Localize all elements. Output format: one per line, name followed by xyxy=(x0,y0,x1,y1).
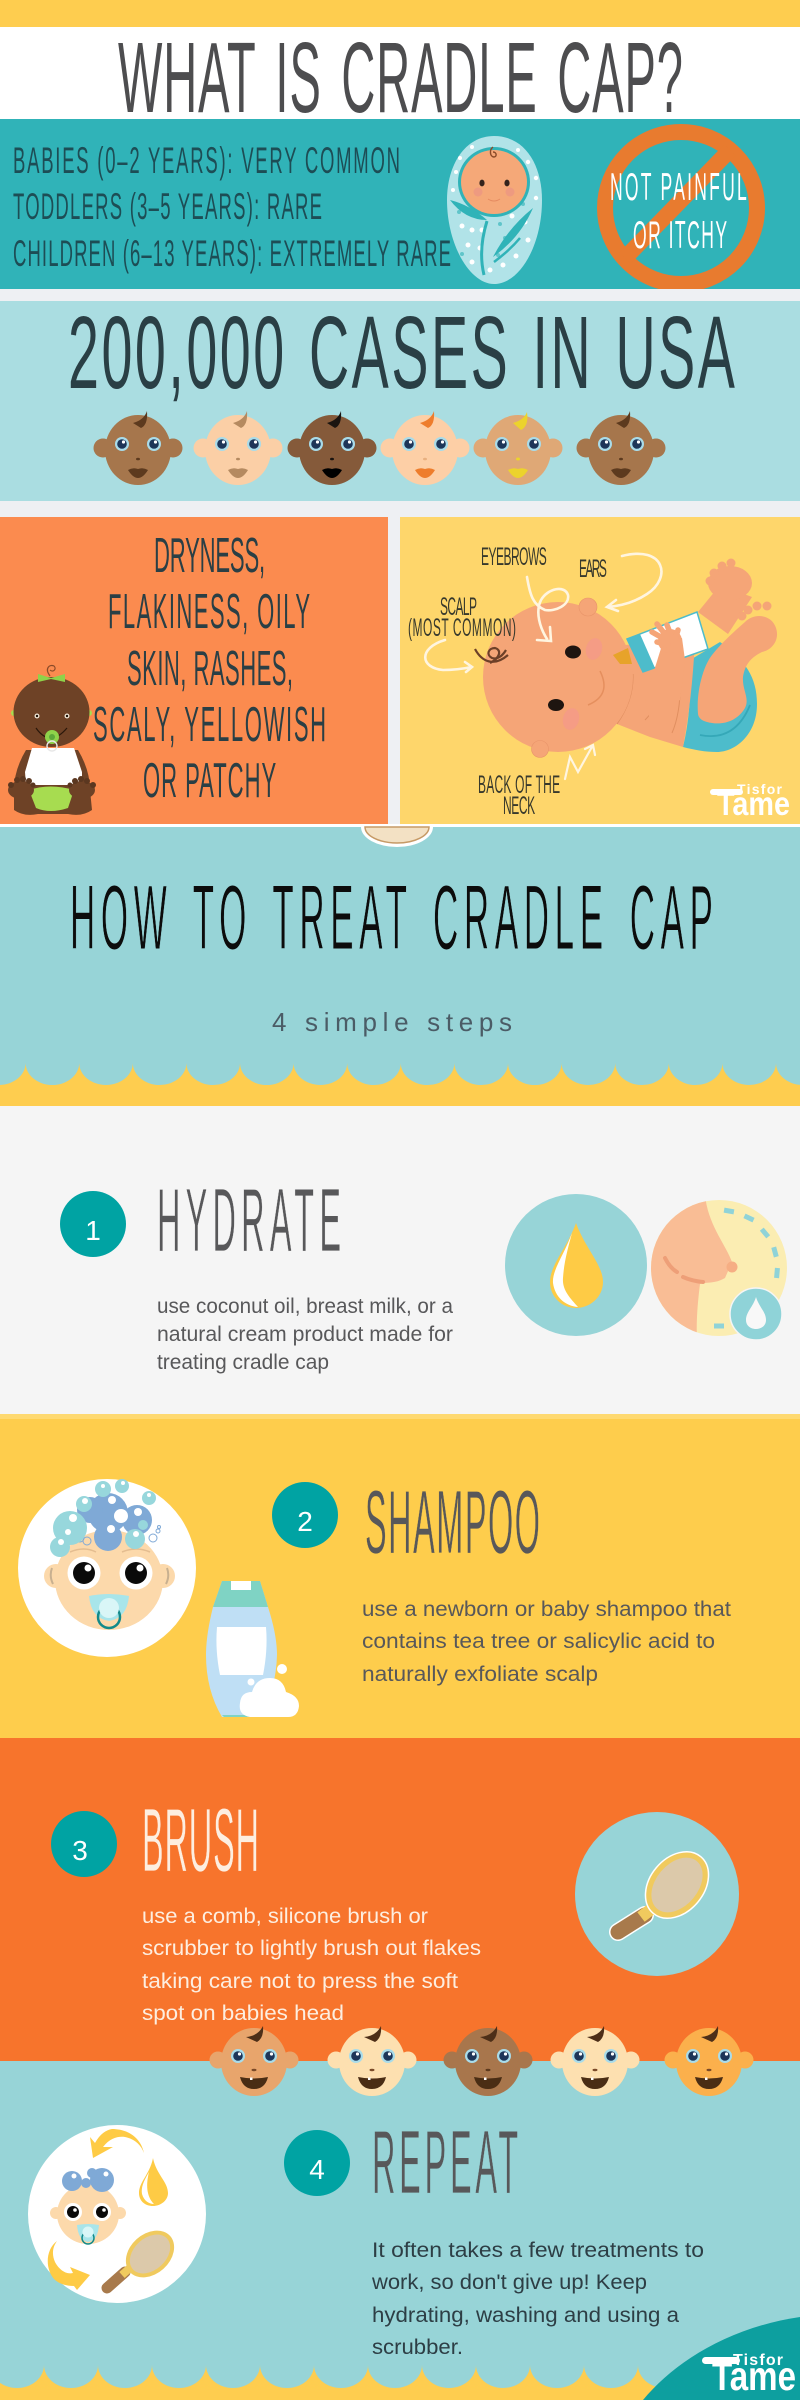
age prevalence text xyxy=(13,141,451,275)
area labels: NECK xyxy=(503,792,535,820)
section gap xyxy=(0,289,800,301)
step text: treating cradle cap xyxy=(157,1351,329,1374)
panel: symptoms xyxy=(0,517,388,824)
face 4 xyxy=(550,2026,640,2096)
step title: SHAMPOO xyxy=(365,1473,540,1573)
hand and arm xyxy=(649,638,685,716)
symptom text: OR PATCHY xyxy=(143,754,276,809)
step text: use coconut oil, breast milk, or a xyxy=(157,1295,453,1318)
head xyxy=(483,602,633,752)
symptom text xyxy=(93,529,326,809)
arrow: eyebrows xyxy=(527,577,568,641)
baby faces row xyxy=(94,411,666,485)
scalloped edge xyxy=(0,2350,800,2400)
title background xyxy=(0,27,800,119)
step text: scrubber to lightly brush out flakes xyxy=(142,1937,481,1960)
area labels xyxy=(408,543,607,820)
logo: Tame xyxy=(717,785,790,822)
arrow: scalp xyxy=(425,640,472,672)
step number 4: 4 xyxy=(309,2154,325,2185)
near leg xyxy=(698,616,777,723)
step text xyxy=(362,1598,731,1686)
section gap xyxy=(0,501,800,827)
face 2 xyxy=(194,411,282,485)
step text: work, so don't give up! Keep xyxy=(371,2271,647,2294)
heading: HOW TO TREAT CRADLE CAP xyxy=(70,866,713,969)
icon: sitting baby xyxy=(8,665,96,815)
subheading: 4 simple steps xyxy=(272,1007,512,1037)
face 2 xyxy=(328,2026,416,2096)
logo badge: Tisfor xyxy=(733,2352,783,2369)
panel: prevalence by age xyxy=(0,119,800,289)
bottle xyxy=(613,648,632,664)
step text: scrubber. xyxy=(372,2336,463,2359)
panel: step 1 hydrate xyxy=(0,1106,800,1414)
age prevalence text: TODDLERS (3–5 YEARS): RARE xyxy=(13,187,322,228)
age prevalence text: BABIES (0–2 YEARS): VERY COMMON xyxy=(13,141,400,182)
step text: use a newborn or baby shampoo that xyxy=(362,1598,731,1621)
age prevalence text: CHILDREN (6–13 YEARS): EXTREMELY RARE xyxy=(13,234,451,275)
step number 4 xyxy=(284,2130,350,2196)
panel: how to treat header xyxy=(0,824,800,1106)
icon: breast with milk drop xyxy=(651,1200,787,1340)
step number 3 xyxy=(51,1811,117,1877)
scalloped edge xyxy=(0,1050,800,1106)
callout text xyxy=(610,166,747,257)
icon: swaddled baby xyxy=(447,136,542,284)
area labels: EYEBROWS xyxy=(481,543,547,571)
laughing baby faces row xyxy=(210,2026,754,2096)
step text xyxy=(142,1905,481,2025)
symptom text: DRYNESS, xyxy=(154,529,265,584)
step text: contains tea tree or salicylic acid to xyxy=(362,1630,715,1653)
face 5 xyxy=(664,2026,754,2096)
icon: repeat cycle xyxy=(28,2125,206,2303)
icon: prohibition sign xyxy=(605,132,757,284)
step text xyxy=(157,1295,453,1374)
step text: hydrating, washing and using a xyxy=(372,2304,679,2327)
step number 1 xyxy=(60,1191,126,1257)
panel: cases in USA xyxy=(0,295,800,501)
icon: shampoo bottle xyxy=(206,1581,299,1717)
arrow: ears xyxy=(607,554,661,611)
face 4 xyxy=(380,411,470,485)
step title: HYDRATE xyxy=(157,1171,341,1271)
callout text: OR ITCHY xyxy=(633,214,727,257)
top yellow band xyxy=(0,0,800,27)
panel: step 2 shampoo xyxy=(0,1414,800,1738)
area labels: BACK OF THE xyxy=(478,771,560,799)
symptom text: SKIN, RASHES, xyxy=(127,642,293,697)
area labels: EARS xyxy=(579,555,607,583)
face 6 xyxy=(576,411,666,485)
arrow: neck xyxy=(565,745,595,779)
step number 1: 1 xyxy=(85,1215,101,1246)
icon: brush xyxy=(575,1812,739,1976)
illustration: baby with bottle xyxy=(475,558,777,758)
headline: 200,000 CASES IN USA xyxy=(68,295,735,410)
diaper xyxy=(683,642,757,752)
symptom text: FLAKINESS, OILY xyxy=(108,585,310,640)
area labels: SCALP xyxy=(440,593,477,621)
logo badge xyxy=(643,2317,800,2400)
logo: Tisfor xyxy=(737,781,783,797)
face 1 xyxy=(210,2026,298,2096)
icon: oil drop xyxy=(505,1194,647,1336)
face 3 xyxy=(288,411,376,485)
step text: It often takes a few treatments to xyxy=(372,2239,704,2262)
step number 2 xyxy=(272,1482,338,1548)
step text: taking care not to press the soft xyxy=(142,1970,458,1993)
torso xyxy=(612,640,695,747)
icon: baby with shampoo bubbles xyxy=(18,1479,196,1657)
step title: BRUSH xyxy=(142,1791,259,1891)
step number 3: 3 xyxy=(72,1835,88,1866)
step text: naturally exfoliate scalp xyxy=(362,1663,598,1686)
step text: use a comb, silicone brush or xyxy=(142,1905,428,1928)
far leg xyxy=(698,558,752,634)
panel: step 4 repeat xyxy=(0,2026,800,2400)
title: WHAT IS CRADLE CAP? xyxy=(118,21,683,134)
step text xyxy=(371,2239,704,2359)
step text: spot on babies head xyxy=(142,2002,344,2025)
step title: REPEAT xyxy=(372,2113,518,2213)
step number 2: 2 xyxy=(297,1506,313,1537)
icon: partial medallion xyxy=(361,827,433,847)
step text: natural cream product made for xyxy=(157,1323,453,1346)
face 3 xyxy=(444,2026,532,2096)
callout text: NOT PAINFUL xyxy=(610,166,747,209)
area labels: (MOST COMMON) xyxy=(408,614,516,642)
panel: affected areas xyxy=(400,517,800,824)
face 1 xyxy=(94,411,182,485)
face 5 xyxy=(474,412,562,485)
symptom text: SCALY, YELLOWISH xyxy=(93,698,326,753)
panel: step 3 brush xyxy=(0,1738,800,2061)
